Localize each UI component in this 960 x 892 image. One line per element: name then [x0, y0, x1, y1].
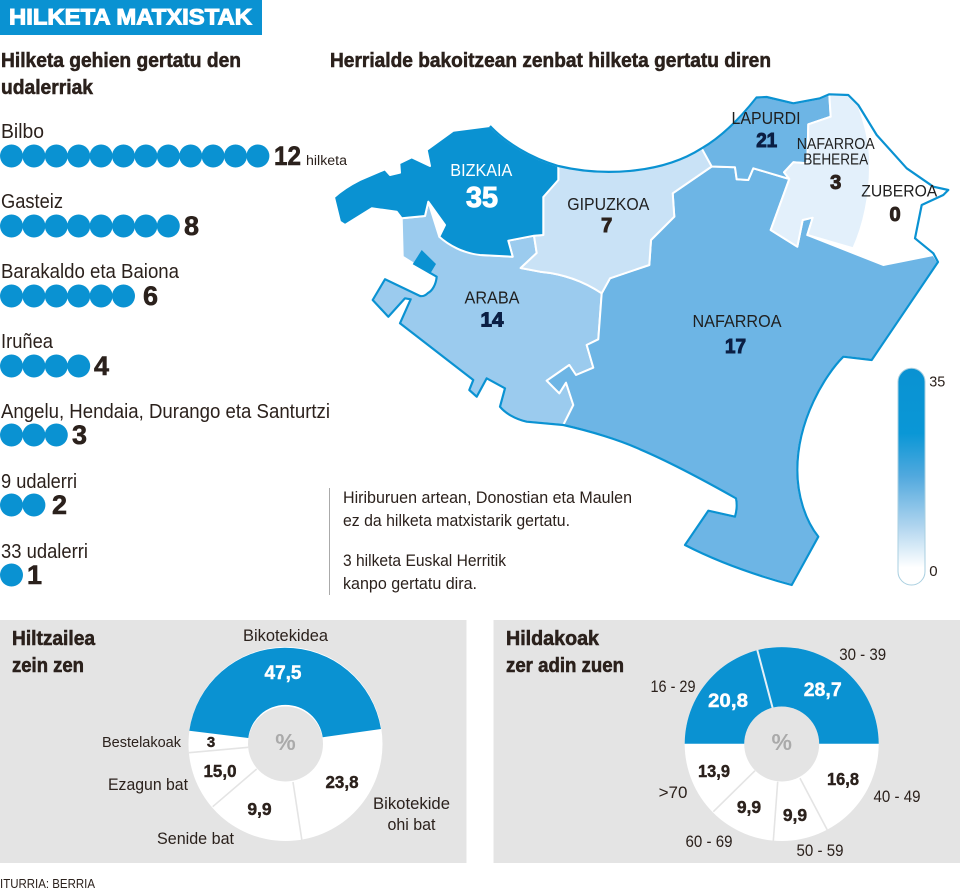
dot row: Angelu, Hendaia, Durango eta Santurtzi: 3 — [72, 420, 87, 450]
dot row: Iruñea: 4 — [94, 351, 109, 381]
map label: Araba: 14 — [480, 310, 504, 332]
donut chart: killer: 47,5 — [264, 663, 302, 684]
chart labels: >70 — [659, 783, 687, 802]
map label: Bizkaia: BIZKAIA — [450, 160, 513, 180]
map label: Gipuzkoa: 7 — [601, 215, 612, 237]
chart labels: 50 - 59 — [796, 841, 844, 860]
heading: map: Herrialde bakoitzean zenbat hilketa gertatu diren — [330, 49, 771, 72]
map label: Nafarroa Beherea — [797, 136, 875, 194]
map label: Bizkaia: 35 — [466, 182, 498, 214]
map label: Lapurdi — [732, 108, 800, 152]
chart labels: ohi bat — [388, 815, 436, 834]
panel heading: Hildakoak — [506, 627, 600, 650]
title banner — [0, 0, 262, 35]
note text block: 3 hilketa Euskal Herritik — [343, 551, 506, 570]
note text block: ez da hilketa matxistarik gertatu. — [343, 511, 570, 530]
chart labels: Bestelakoak — [102, 734, 181, 751]
dot row: Gasteiz: Gasteiz — [1, 190, 63, 213]
chart labels: 16 - 29 — [650, 677, 696, 696]
map label: Nafarroa Beherea: BEHEREA — [803, 152, 868, 168]
donut chart: age — [685, 647, 879, 841]
map label: Nafarroa — [692, 311, 782, 358]
map label: Nafarroa: 17 — [725, 336, 746, 358]
chart labels — [650, 645, 920, 860]
dot row: Bilbo: hilketa — [306, 153, 348, 168]
dot row: Iruñea — [0, 330, 109, 381]
donut chart: age: 16,8 — [827, 769, 859, 789]
colour scale legend: 35 — [929, 374, 945, 391]
chart labels: Senide bat — [157, 829, 234, 848]
panel heading: Hiltzailea — [12, 627, 96, 650]
choropleth map — [334, 94, 948, 585]
panel heading — [506, 627, 624, 677]
map label: Araba: ARABA — [464, 287, 520, 307]
region: Nafarroa Beherea — [771, 94, 870, 248]
dot row: 33 udalerri — [0, 540, 88, 590]
map label: Lapurdi: 21 — [756, 130, 777, 152]
dot row: 9 udalerri: 2 — [52, 490, 67, 520]
map label: Araba — [464, 287, 520, 332]
chart labels: 40 - 49 — [874, 787, 920, 806]
dot row: 9 udalerri: 9 udalerri — [1, 470, 77, 493]
donut chart: killer: 23,8 — [326, 772, 359, 792]
heading: municipalities — [1, 49, 241, 99]
map label: Nafarroa Beherea: 3 — [830, 172, 841, 194]
region: Bizkaia enclave — [413, 250, 436, 274]
panel: Hiltzailea zein zen — [0, 620, 466, 863]
dot row: Bilbo: 12 — [274, 141, 301, 171]
dot row: Gasteiz — [0, 190, 199, 241]
donut chart: age: 9,9 — [783, 805, 807, 825]
dot row: Barakaldo eta Baiona: Barakaldo eta Baiona — [1, 260, 180, 283]
coast outline — [373, 94, 948, 585]
dot row: 33 udalerri: 33 udalerri — [1, 540, 88, 563]
map label: Gipuzkoa: GIPUZKOA — [567, 194, 650, 214]
note text block: kanpo gertatu dira. — [343, 574, 477, 593]
donut chart: killer: % — [275, 729, 296, 755]
chart labels — [102, 626, 450, 848]
chart labels: Bikotekidea — [243, 626, 329, 645]
region: Lapurdi — [702, 94, 831, 180]
source note: ITURRIA: BERRIA — [0, 877, 96, 891]
dot row: 33 udalerri: 1 — [27, 560, 42, 590]
chart labels: Ezagun bat — [108, 775, 188, 794]
donut chart: killer: 15,0 — [204, 761, 237, 781]
donut chart: killer — [188, 647, 382, 841]
dot row: Barakaldo eta Baiona: 6 — [143, 281, 158, 311]
chart labels: 60 - 69 — [686, 832, 732, 851]
donut chart: age: % — [771, 729, 792, 755]
chart labels: 30 - 39 — [839, 645, 886, 664]
map label: Zuberoa — [861, 183, 937, 226]
dot row: 9 udalerri — [0, 470, 77, 520]
donut chart: age: 9,9 — [737, 797, 761, 817]
panel heading: zein zen — [12, 654, 84, 677]
map label: Gipuzkoa — [567, 194, 650, 237]
map label: Nafarroa Beherea: NAFARROA — [797, 136, 875, 153]
colour scale legend: 0 — [929, 563, 938, 580]
region: Gipuzkoa — [521, 148, 712, 293]
region: Araba — [373, 202, 602, 425]
dot row: Iruñea: Iruñea — [1, 330, 54, 353]
title banner: HILKETA MATXISTAK — [9, 4, 252, 30]
dot row: Barakaldo eta Baiona — [0, 260, 180, 311]
dot row: Bilbo — [0, 120, 348, 171]
map label: Lapurdi: LAPURDI — [732, 108, 800, 128]
chart labels: Bikotekide — [373, 794, 450, 813]
dot row: Angelu, Hendaia, Durango eta Santurtzi — [0, 400, 330, 450]
panel: Hildakoak zer adin zuen — [494, 620, 960, 863]
donut chart: age: 13,9 — [698, 761, 730, 781]
donut chart: killer: 3 — [207, 734, 215, 751]
note text block — [330, 488, 632, 595]
region: Nafarroa — [547, 166, 938, 585]
dot row: Bilbo: Bilbo — [1, 120, 44, 143]
heading: municipalities: Hilketa gehien gertatu den — [1, 49, 241, 72]
heading: municipalities: udalerriak — [1, 76, 94, 99]
panel heading — [12, 627, 96, 677]
colour scale legend — [898, 368, 945, 585]
donut chart: age: 28,7 — [804, 679, 842, 701]
donut chart: age: 20,8 — [708, 690, 748, 712]
note text block: Hiriburuen artean, Donostian eta Maulen — [343, 488, 632, 507]
map label: Nafarroa: NAFARROA — [692, 311, 782, 331]
dot row: Angelu, Hendaia, Durango eta Santurtzi: Angelu, Hendaia, Durango eta Santurtzi — [1, 400, 330, 423]
region: Bizkaia — [334, 126, 558, 257]
panel heading: zer adin zuen — [506, 654, 624, 677]
region: Zuberoa — [853, 105, 948, 265]
donut chart: killer: 9,9 — [247, 799, 272, 819]
dot row: Gasteiz: 8 — [184, 211, 199, 241]
map label: Zuberoa: 0 — [889, 204, 901, 226]
map label: Bizkaia — [450, 160, 513, 214]
map label: Zuberoa: ZUBEROA — [861, 183, 937, 201]
